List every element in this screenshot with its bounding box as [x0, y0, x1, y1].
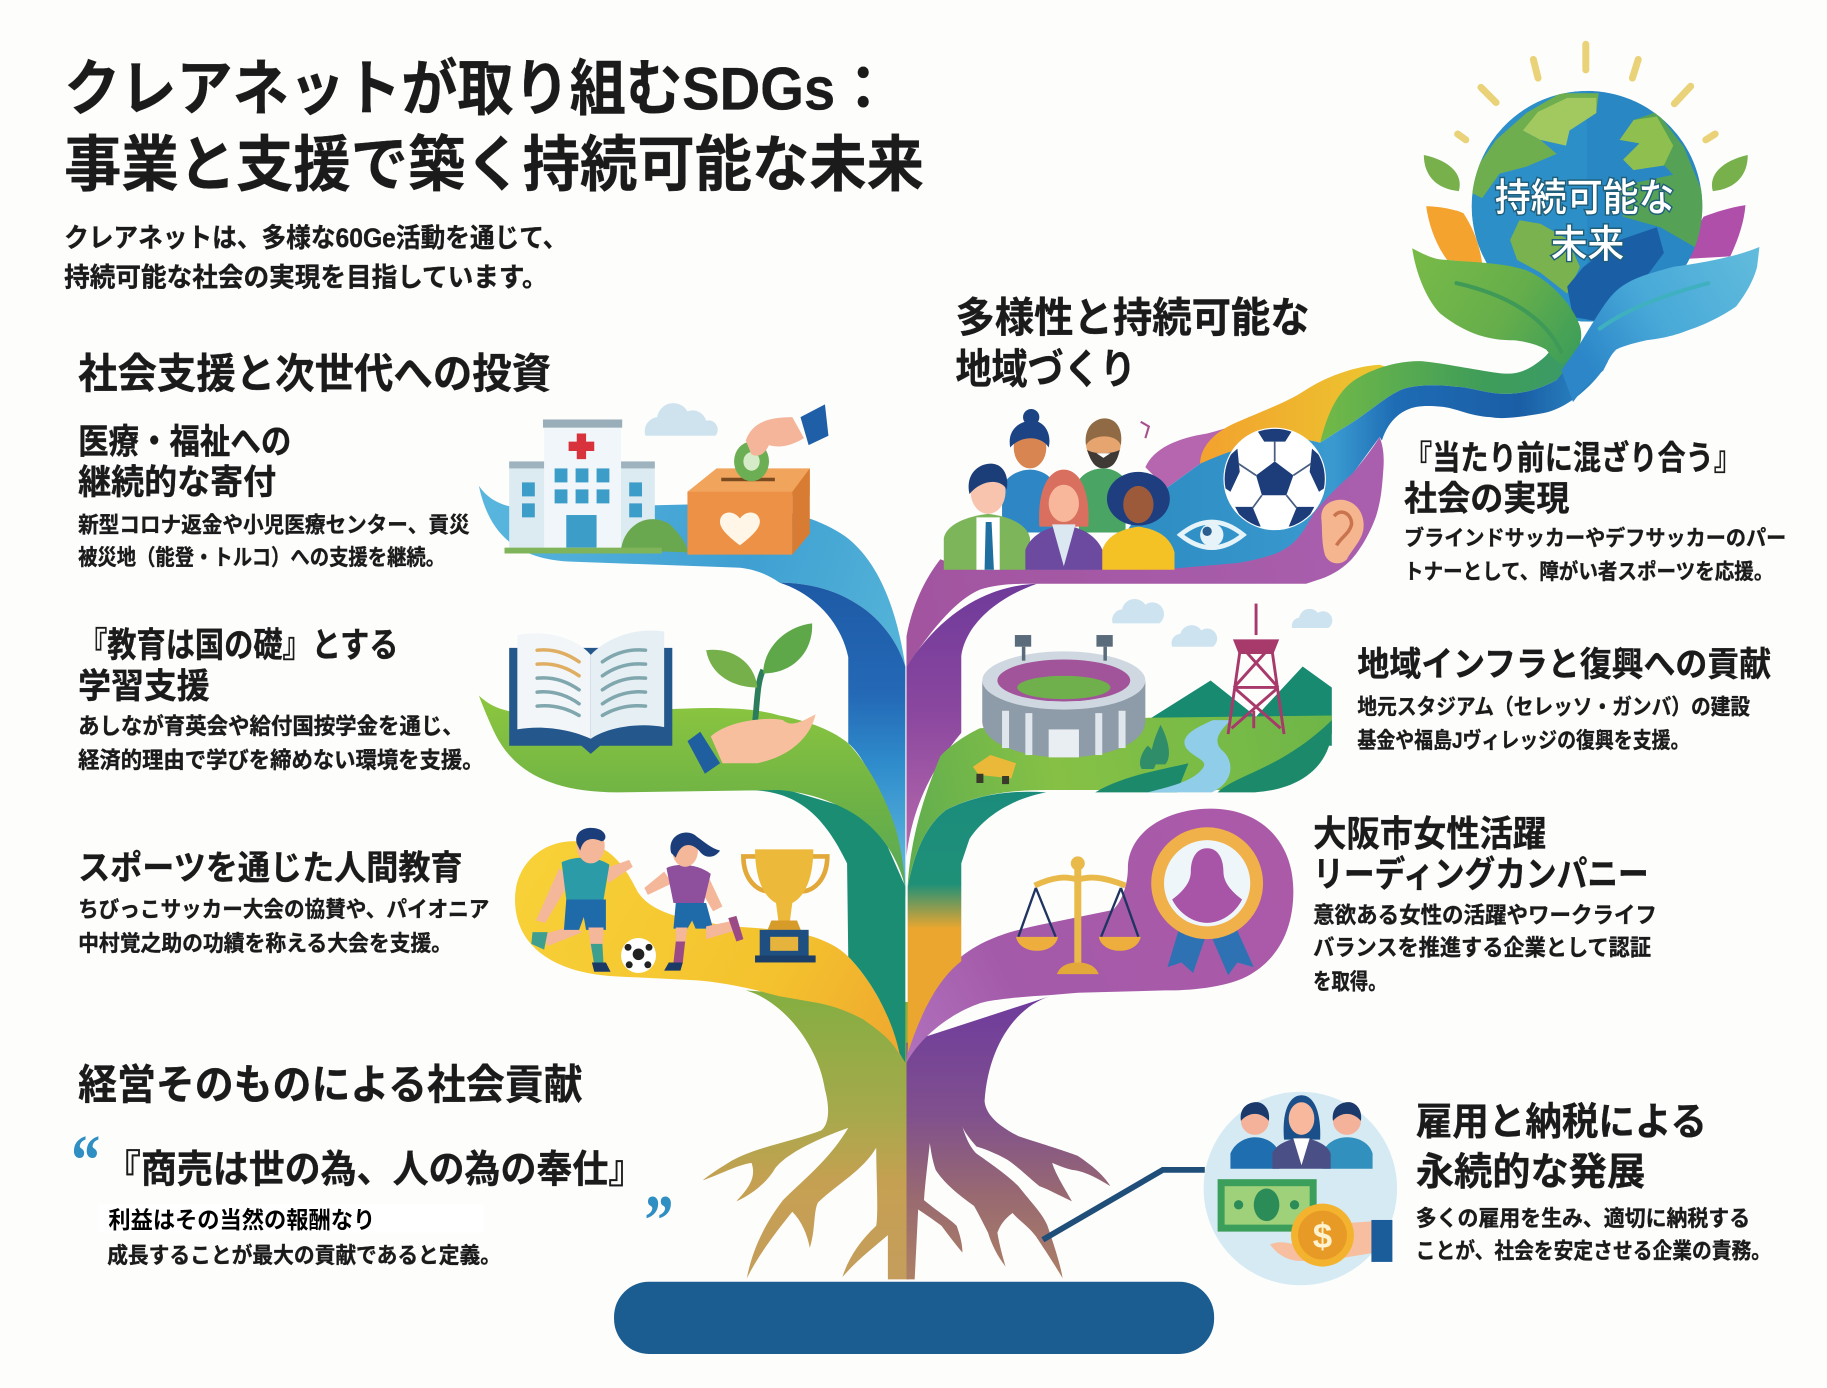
block: infrastructure and recovery: 地域インフラと復興への貢献	[1357, 646, 1771, 684]
block: inclusive society: 社会の実現	[1404, 479, 1570, 518]
pedestal	[614, 1282, 1214, 1354]
mid right green branch	[908, 667, 1332, 1053]
title: 事業と支援で築く持続可能な未来	[64, 130, 924, 198]
yellow branch	[515, 841, 904, 1066]
dark ocean	[1567, 227, 1664, 322]
icon: hospital	[505, 403, 718, 553]
icon: trophy	[743, 849, 827, 962]
right employee	[1322, 1102, 1373, 1169]
continent: right side	[1617, 112, 1706, 249]
title	[64, 55, 924, 198]
globe label: 未来	[1551, 224, 1624, 267]
intro text: 持続可能な社会の実現を目指しています。	[64, 263, 548, 293]
block: medical and welfare donation: 継続的な寄付	[78, 463, 276, 502]
connector line	[1043, 1170, 1205, 1240]
clouds	[1112, 599, 1332, 647]
heading: diverse community	[955, 295, 1310, 392]
block: women's leadership: 大阪市女性活躍	[1313, 814, 1546, 854]
block: sports education: ちびっこサッカー大会の協賛や、パイオニア	[78, 897, 489, 922]
right roots	[907, 996, 1110, 1279]
big green leaf	[1412, 248, 1581, 364]
player two	[644, 833, 743, 971]
intro text: クレアネットは、多様な60Ge活動を通じて、	[64, 223, 567, 253]
block: sports education	[78, 850, 489, 956]
block: women's leadership: バランスを推進する企業として認証	[1313, 934, 1651, 960]
heading: diverse community: 地域づくり	[955, 346, 1136, 392]
icon: donation box	[687, 404, 828, 555]
block: inclusive society: ブラインドサッカーやデフサッカーのパー	[1404, 525, 1786, 550]
block: education support: あしなが育英会や給付国按学金を通じ、	[78, 713, 464, 739]
player one	[531, 828, 633, 972]
block: employment and taxes	[1416, 1101, 1771, 1263]
teal trunk ribbon	[746, 788, 905, 1063]
quote explanation	[99, 1205, 501, 1268]
quote explanation: 成長することが最大の貢献であると定義。	[107, 1243, 501, 1268]
leaf veins	[1456, 283, 1708, 352]
block: sports education: 中村覚之助の功績を称える大会を支援。	[78, 931, 452, 956]
river and dark ground	[1095, 720, 1332, 792]
block: medical and welfare donation: 新型コロナ返金や小児医療センター、貢災	[78, 513, 470, 538]
closing quote mark: ”	[644, 1180, 673, 1260]
block: medical and welfare donation: 被災地（能登・トルコ）への支援を継続。	[78, 545, 445, 570]
block: infrastructure and recovery	[1357, 646, 1771, 753]
man in green suit	[944, 464, 1030, 570]
block: employment and taxes: ことが、社会を安定させる企業の責務。	[1416, 1238, 1771, 1263]
blue branch lower dark band	[780, 583, 905, 897]
icon: sprout in hand	[687, 623, 816, 774]
small mark	[1141, 422, 1149, 438]
sun rays	[1458, 44, 1715, 140]
icon: eye	[1180, 522, 1243, 548]
top right purple branch dark band	[907, 584, 1037, 856]
banknote	[1218, 1179, 1317, 1232]
block: employment and taxes: 永続的な発展	[1416, 1151, 1645, 1194]
heading: social support: 社会支援と次世代への投資	[78, 351, 551, 397]
block: women's leadership	[1313, 814, 1657, 994]
top right purple back lobe	[1145, 400, 1305, 488]
green branch	[479, 696, 905, 887]
centre employee	[1272, 1095, 1331, 1169]
block: sports education: スポーツを通じた人間教育	[78, 850, 463, 888]
quote explanation: 利益はその当然の報酬なり	[108, 1207, 375, 1233]
small leaves	[1424, 155, 1748, 191]
trees	[1140, 725, 1169, 769]
block: employment and taxes: 多くの雇用を生み、適切に納税する	[1416, 1206, 1750, 1231]
block: medical and welfare donation: 医療・福祉への	[78, 422, 291, 461]
quote text: 『商売は世の為、人の為の奉仕』	[105, 1149, 644, 1192]
continent: upper left	[1470, 93, 1599, 198]
lattice tower	[1228, 604, 1284, 734]
block: infrastructure and recovery: 地元スタジアム（セレッソ・ガンバ）の建設	[1357, 694, 1750, 719]
blue branch upper light band	[479, 486, 905, 667]
lower right purple branch	[907, 809, 1293, 1063]
quote block	[71, 1120, 673, 1268]
person with bun	[1002, 409, 1056, 533]
coin in hand: $	[1313, 1217, 1332, 1256]
block: infrastructure and recovery: 基金や福島Jヴィレッジの復興を支援。	[1357, 728, 1690, 753]
petals	[1426, 206, 1482, 263]
icon: open book	[509, 631, 672, 754]
top right green stem band	[1320, 332, 1587, 443]
block: employment and taxes: 雇用と納税による	[1416, 1101, 1707, 1144]
title: クレアネットが取り組むSDGs：	[64, 55, 891, 123]
block: inclusive society	[1404, 439, 1786, 584]
soccer ball	[621, 938, 656, 973]
left roots	[703, 990, 909, 1279]
left employee	[1230, 1102, 1279, 1169]
block: women's leadership: を取得。	[1313, 968, 1387, 994]
block: inclusive society: トナーとして、障がい者スポーツを応援。	[1404, 559, 1773, 584]
block: education support: 『教育は国の礎』とする	[78, 626, 398, 665]
globe label: 持続可能な	[1495, 177, 1674, 220]
stadium bowl	[982, 651, 1145, 757]
big blue leaf	[1561, 247, 1759, 402]
top right purple branch light band	[907, 437, 1384, 667]
block: education support	[78, 626, 484, 773]
icon: scales of justice	[1016, 856, 1141, 974]
icon: employment and tax circle	[1204, 1092, 1397, 1285]
block: medical and welfare donation	[78, 422, 470, 570]
coin in hand	[1270, 1204, 1392, 1267]
bearded man	[1079, 418, 1126, 533]
intro text	[64, 223, 567, 293]
icon: group of diverse people	[944, 409, 1174, 570]
opening quote mark: “	[71, 1120, 100, 1200]
icon: soccer players	[531, 828, 743, 973]
tree: roots, trunk and branch ribbons	[479, 332, 1608, 1279]
block: women's leadership: 意欲ある女性の活躍やワークライフ	[1313, 902, 1657, 928]
block: education support: 学習支援	[78, 667, 210, 706]
globe	[1470, 89, 1706, 322]
block: education support: 経済的理由で学びを締めない環境を支援。	[78, 747, 484, 773]
heading: social contribution through management: 経営そのものによる社会貢献	[78, 1062, 583, 1108]
woman with curly hair	[1102, 472, 1174, 570]
block: women's leadership: リーディングカンパニー	[1313, 855, 1649, 895]
icon: stadium and landscape	[973, 599, 1332, 792]
top right blue stem band	[1107, 361, 1608, 571]
floodlights	[1015, 635, 1113, 661]
heading: diverse community: 多様性と持続可能な	[955, 295, 1310, 341]
icon: ear	[1321, 500, 1364, 563]
small yellow hut	[973, 755, 1016, 784]
icon: soccer ball	[1223, 428, 1326, 530]
earth with leaves	[1412, 44, 1759, 402]
continent: lower	[1510, 220, 1580, 294]
icon: award medal	[1151, 827, 1263, 975]
woman in purple suit	[1025, 470, 1103, 570]
globe label	[1495, 177, 1674, 267]
block: inclusive society: 『当たり前に混ざり合う』	[1404, 439, 1742, 478]
top right orange band	[1200, 365, 1398, 464]
